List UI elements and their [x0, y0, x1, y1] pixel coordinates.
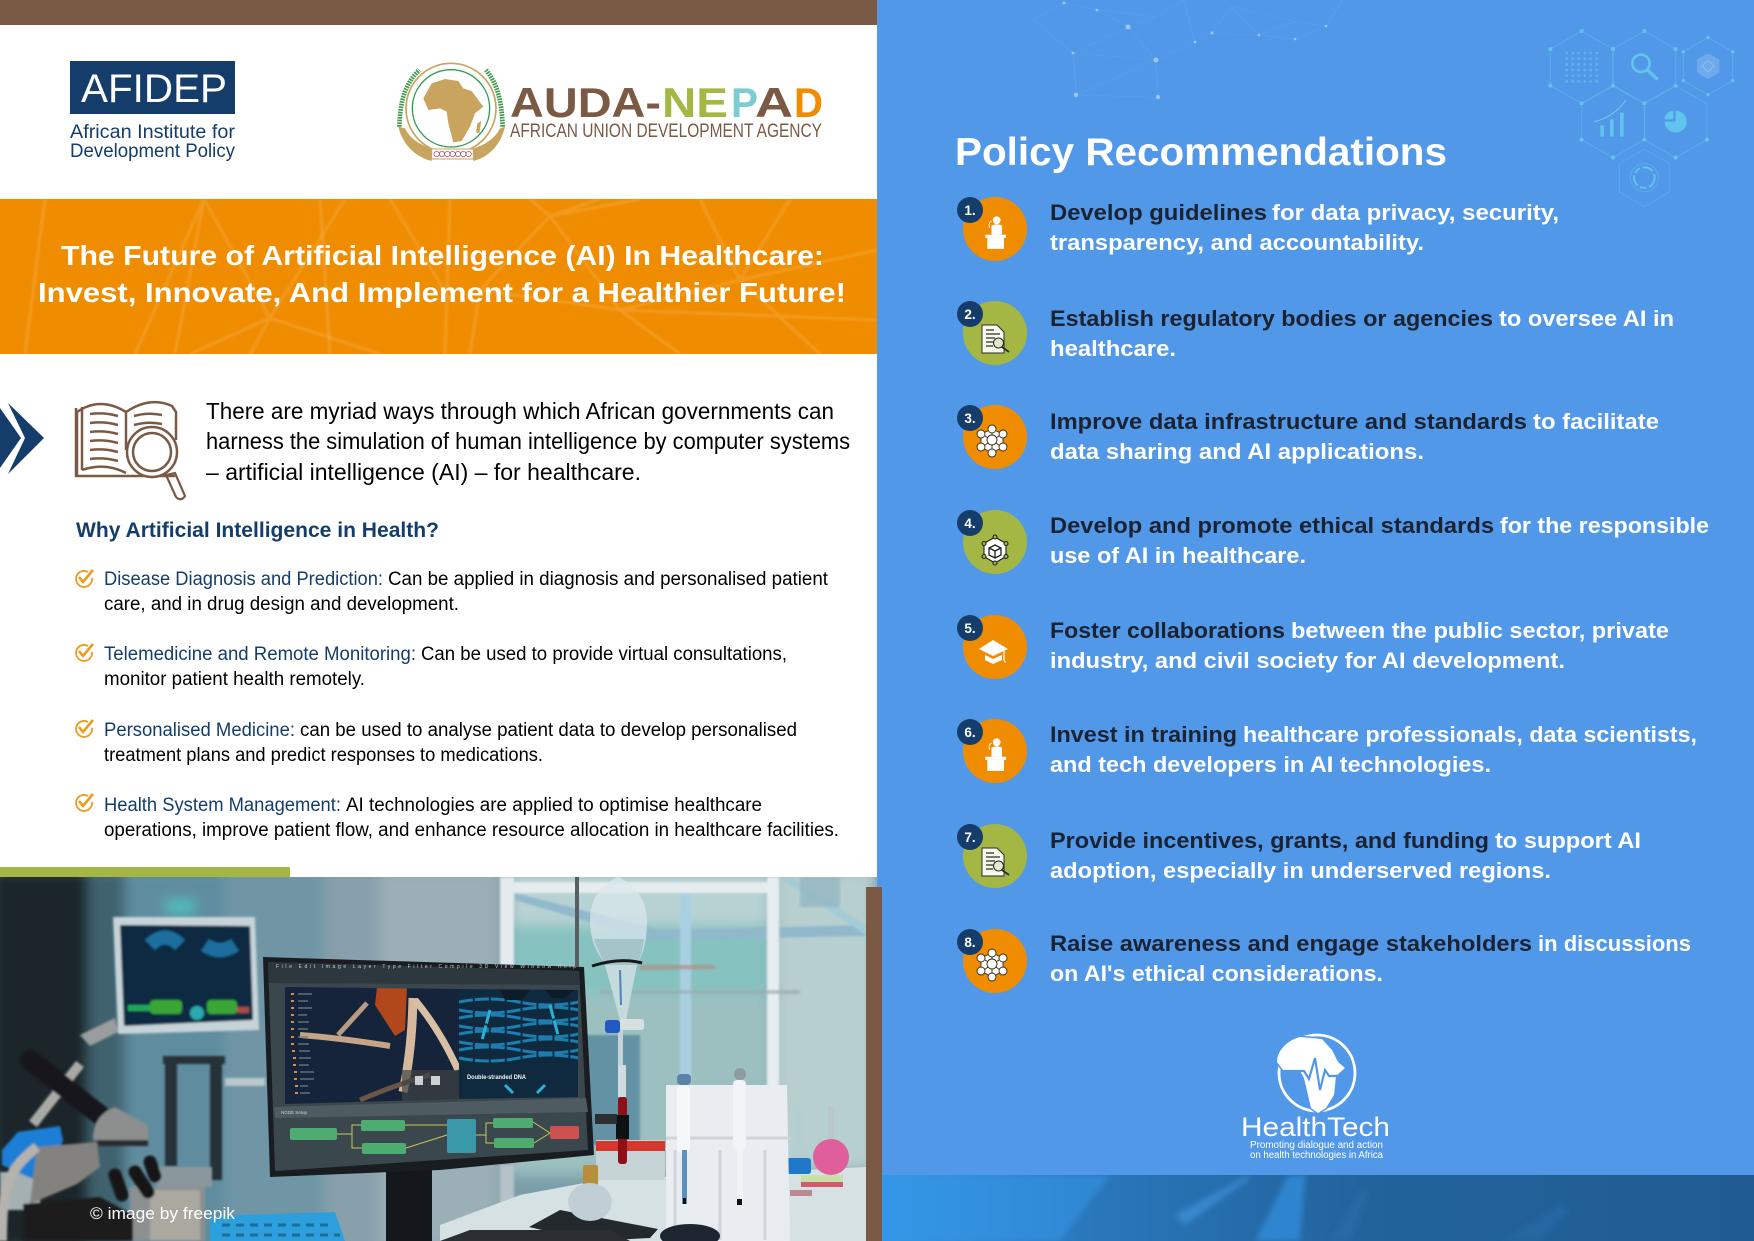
bullet: telemedicine: Telemedicine and Remote Monitoring:	[104, 644, 416, 665]
top brown bar	[0, 0, 877, 25]
separatory funnel	[575, 877, 647, 1164]
logo: HealthTech: Promoting dialogue and action	[1250, 1140, 1383, 1151]
bullet: personalised medicine: treatment plans and predict responses to medications.	[104, 745, 543, 766]
item 1	[957, 197, 1559, 261]
panel: left column header	[0, 0, 877, 162]
heading: policy recommendations: Policy Recommendations	[955, 131, 1447, 174]
item 8: Raise awareness and engage stakeholders	[1050, 931, 1532, 956]
bullet: personalised medicine: can be used to analyse patient data to develop personalised	[300, 720, 797, 741]
title text: Invest, Innovate, And Implement for a Healthier Future!	[38, 277, 846, 308]
item 8: 8.	[964, 935, 976, 950]
logo: AFIDEP: Development Policy	[70, 141, 235, 162]
microscope and bench	[0, 1060, 212, 1241]
item 6: and tech developers in AI technologies.	[1050, 752, 1491, 777]
test tubes	[596, 1140, 665, 1180]
table	[440, 1167, 866, 1241]
icon cluster: hexagons	[1548, 29, 1734, 207]
item 7: adoption, especially in underserved regions.	[1050, 858, 1551, 883]
item 6: Invest in training	[1050, 722, 1237, 747]
logo: AUDA-NEPAD: AUDA-	[510, 79, 661, 126]
title text	[38, 240, 846, 308]
item 1: Develop guidelines	[1050, 200, 1267, 225]
heading: why AI in health: Why Artificial Intelligence in Health?	[76, 518, 439, 542]
item 8: on AI's ethical considerations.	[1050, 961, 1383, 986]
bullet: health system management	[76, 794, 839, 841]
item 7	[957, 824, 1641, 888]
logo: HealthTech	[1241, 1035, 1390, 1161]
list: why AI reasons	[76, 569, 839, 841]
item 4: use of AI in healthcare.	[1050, 543, 1306, 568]
item 2	[957, 301, 1674, 365]
icon: book and magnifier	[76, 402, 185, 499]
pipette rack	[666, 1068, 790, 1241]
bullet: health system management: Health System Management:	[104, 795, 341, 816]
main monitor: NODE Setup	[281, 1110, 308, 1115]
bullet: disease diagnosis: care, and in drug design and development.	[104, 594, 459, 615]
title text: The Future of Artificial Intelligence (AI) In Healthcare:	[61, 240, 824, 271]
item 2: healthcare.	[1050, 336, 1176, 361]
bullet: disease diagnosis	[76, 569, 829, 615]
decorative network lines	[1033, 0, 1343, 99]
item 3: 3.	[964, 411, 976, 426]
item 3: Improve data infrastructure and standards	[1050, 409, 1527, 434]
photo credit: © image by freepik	[90, 1204, 236, 1223]
text block: introduction: There are myriad ways through which African governments can	[206, 398, 834, 424]
item 5: Foster collaborations	[1050, 618, 1285, 643]
bullet: disease diagnosis: Can be applied in diagnosis and personalised patient	[388, 569, 829, 590]
logo: HealthTech: HealthTech	[1241, 1112, 1390, 1142]
item 7: to support AI	[1495, 828, 1641, 853]
small rear monitor	[80, 917, 259, 1046]
bottom blue band	[882, 1175, 1754, 1241]
item 8	[957, 929, 1691, 993]
bullet: telemedicine	[76, 644, 787, 690]
bullet: health system management: AI technologies are applied to optimise healthcare	[346, 795, 762, 816]
photo: laboratory with computer monitor	[0, 870, 877, 1241]
panel: right blue background	[877, 0, 1754, 1241]
panel: orange title banner	[0, 199, 877, 354]
blue tube rack	[210, 1212, 345, 1241]
item 8: in discussions	[1538, 931, 1691, 956]
item 1: for data privacy, security,	[1272, 200, 1559, 225]
item 6	[957, 719, 1697, 783]
logo: AUDA-NEPAD: P	[731, 79, 758, 126]
main monitor: Double-stranded DNA	[467, 1075, 527, 1081]
item 4	[957, 510, 1709, 574]
item 5: industry, and civil society for AI development.	[1050, 648, 1565, 673]
item 2: 2.	[964, 307, 976, 322]
item 4: Develop and promote ethical standards	[1050, 513, 1494, 538]
item 4: for the responsible	[1500, 513, 1709, 538]
logo: AUDA-NEPAD: NE	[662, 79, 728, 126]
text block: introduction: harness the simulation of human intelligence by computer systems	[206, 428, 850, 454]
item 1: 1.	[964, 203, 976, 218]
text block: introduction: – artificial intelligence (AI) – for healthcare.	[206, 459, 641, 485]
logo: AUDA-NEPAD: A	[755, 79, 793, 126]
green accent bar	[0, 867, 290, 877]
bullet: personalised medicine	[76, 720, 797, 766]
shelves and posts	[500, 877, 866, 1211]
bullet: telemedicine: monitor patient health remotely.	[104, 669, 365, 690]
spirit lamp, stand, keyboard and mouse	[440, 1165, 720, 1241]
logo: AUDA-NEPAD	[398, 63, 823, 161]
bullet: telemedicine: Can be used to provide virtual consultations,	[421, 644, 787, 665]
logo: AFIDEP: AFIDEP	[81, 67, 227, 111]
logo: AUDA-NEPAD: AFRICAN UNION DEVELOPMENT AGENCY	[510, 121, 822, 142]
brown side bar	[866, 887, 882, 1241]
icon: navy chevrons	[0, 403, 44, 474]
text block: introduction	[206, 398, 850, 485]
item 7: 7.	[964, 830, 976, 845]
item 5	[957, 615, 1669, 679]
flasks and dish	[787, 1105, 849, 1196]
rear dark stand	[163, 1056, 265, 1180]
item 5: 5.	[964, 621, 976, 636]
item 5: between the public sector, private	[1291, 618, 1669, 643]
main monitor: File Edit Image Layer Type Filter Compile 3D View Window Help	[276, 964, 576, 970]
main monitor	[263, 957, 594, 1241]
item 1: transparency, and accountability.	[1050, 230, 1424, 255]
item 4: 4.	[964, 516, 976, 531]
item 6: healthcare professionals, data scientists,	[1243, 722, 1697, 747]
item 6: 6.	[964, 725, 976, 740]
list: policy recommendations	[957, 197, 1709, 993]
item 3: to facilitate	[1533, 409, 1659, 434]
item 2: Establish regulatory bodies or agencies	[1050, 306, 1493, 331]
logo: AUDA-NEPAD: D	[794, 79, 823, 126]
logo: AFIDEP: African Institute for	[70, 122, 236, 143]
logo: AFIDEP	[70, 61, 236, 162]
item 2: to oversee AI in	[1499, 306, 1674, 331]
bullet: personalised medicine: Personalised Medicine:	[104, 720, 295, 741]
item 3	[957, 405, 1659, 469]
blurred background wall	[0, 870, 875, 1241]
item 3: data sharing and AI applications.	[1050, 439, 1424, 464]
item 7: Provide incentives, grants, and funding	[1050, 828, 1489, 853]
logo: HealthTech: on health technologies in Africa	[1250, 1150, 1383, 1161]
bullet: health system management: operations, improve patient flow, and enhance resource allocation in healthcare facilities.	[104, 820, 839, 841]
bullet: disease diagnosis: Disease Diagnosis and Prediction:	[104, 569, 383, 590]
